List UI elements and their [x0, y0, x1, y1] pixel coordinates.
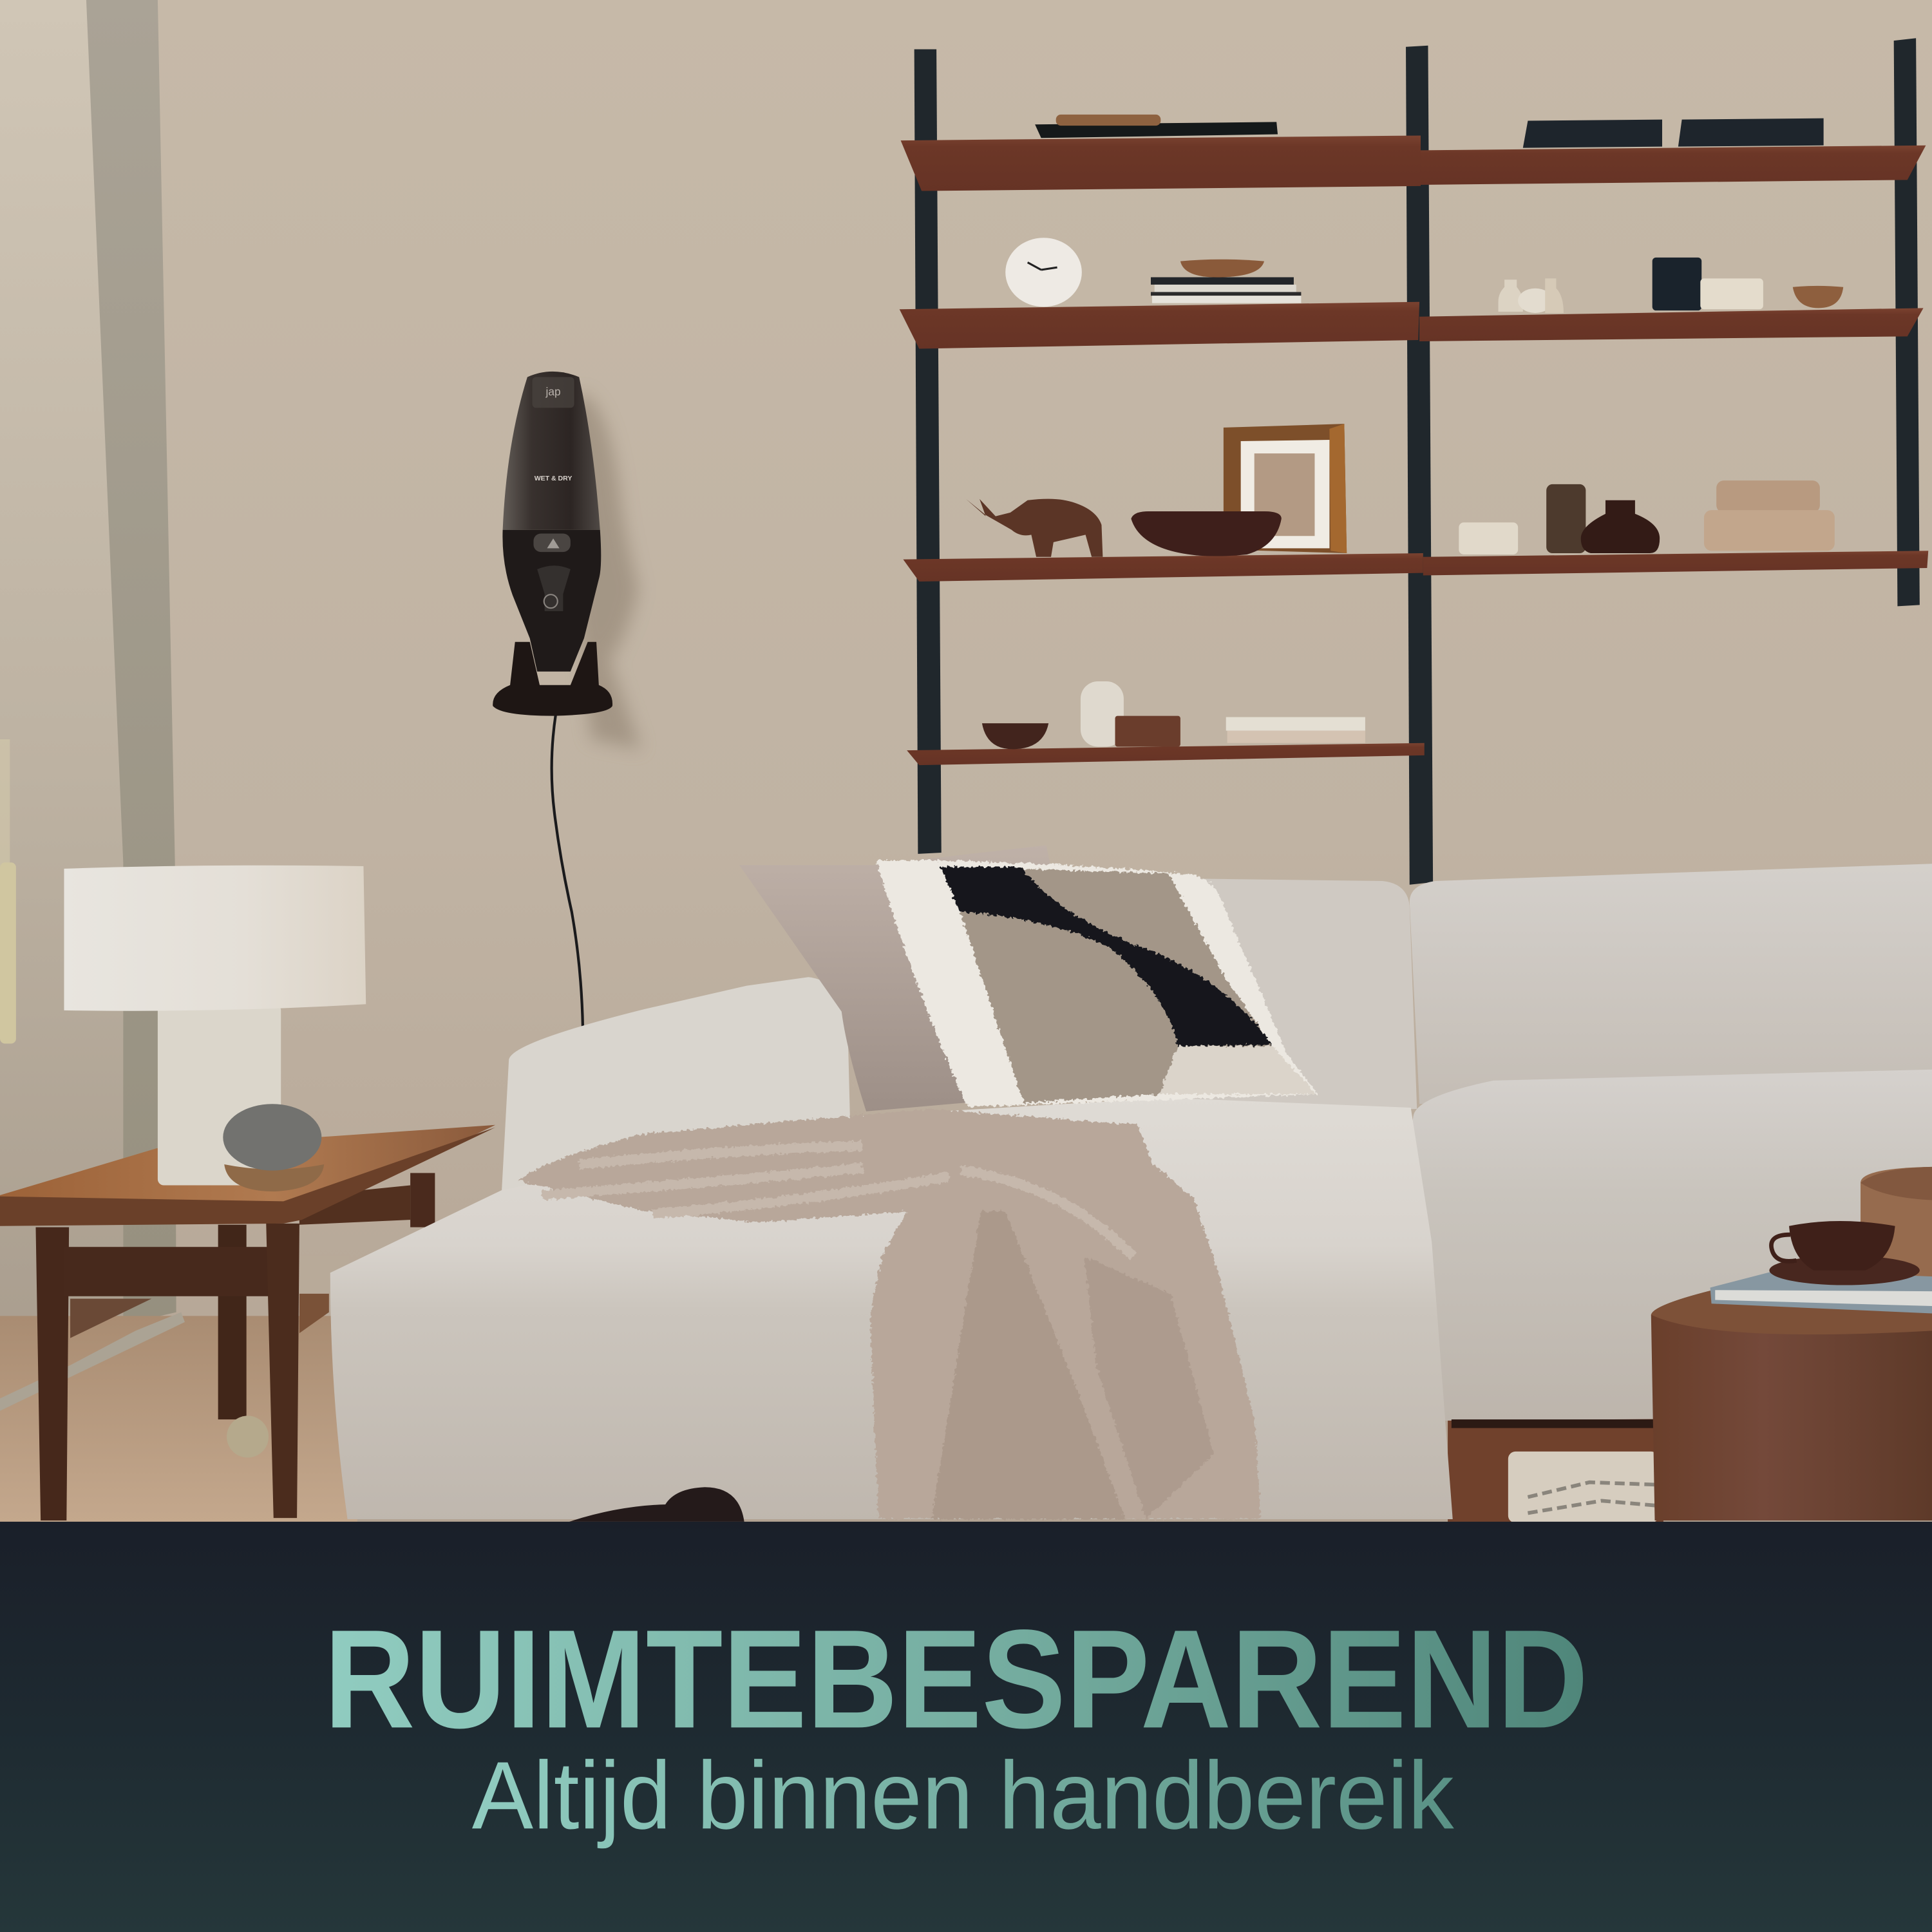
pillow black shape	[940, 866, 1273, 1046]
front patterned pillow	[876, 860, 1318, 1106]
throw shadow	[1084, 1257, 1214, 1519]
vacuum shadow	[554, 392, 641, 749]
fourth shelf	[907, 743, 1425, 765]
dust container	[503, 372, 600, 530]
charging cable	[552, 715, 583, 1028]
sofa	[330, 864, 1932, 1519]
picture frame	[1224, 424, 1347, 553]
second shelf	[900, 302, 1924, 348]
front legs and brace	[35, 1227, 69, 1520]
side table	[0, 1125, 495, 1520]
pillow lower band	[1159, 1046, 1316, 1094]
wall background	[0, 0, 1932, 1528]
object at bottom edge	[569, 1487, 744, 1522]
logo text: jap	[545, 385, 561, 398]
release button	[533, 533, 571, 552]
lamp base	[158, 1004, 281, 1186]
cup	[1789, 1221, 1895, 1271]
cup handle	[1771, 1235, 1797, 1261]
pillow body	[876, 860, 1318, 1106]
saucer	[1769, 1256, 1920, 1285]
sofa middle back cushion	[1183, 878, 1417, 1115]
sofa right seat	[1406, 1070, 1932, 1421]
wall shelving unit	[900, 38, 1928, 885]
knitted throw blanket	[518, 1109, 1260, 1519]
table lamp	[64, 866, 366, 1186]
model text: WET & DRY	[535, 475, 572, 482]
dark bowl	[1131, 511, 1282, 556]
top shelf objects	[1035, 115, 1824, 148]
throw fold lines	[542, 1146, 1133, 1257]
sofa right back cushion	[1410, 864, 1932, 1104]
bottom caption panel	[0, 1522, 1932, 1932]
headline: RUIMTEBESPAREND	[324, 1601, 1588, 1757]
rear legs and apron	[410, 1173, 435, 1227]
book and coffee cup	[1710, 1221, 1932, 1314]
top shelf	[901, 135, 1926, 191]
caster wheel	[227, 1416, 269, 1457]
clock	[1005, 238, 1082, 307]
control panel	[537, 565, 571, 611]
draped throw	[518, 1109, 1260, 1519]
wall-mounted handheld vacuum	[493, 372, 641, 1028]
motor body	[502, 530, 601, 672]
floor	[0, 1256, 1663, 1523]
subheading: Altijd binnen handbereik	[472, 1741, 1454, 1849]
uprights	[914, 38, 1920, 885]
wooden stump table	[1651, 1280, 1932, 1520]
lamp shade	[64, 866, 366, 1011]
pillow pattern field	[940, 866, 1273, 1103]
back round stump	[1861, 1167, 1932, 1290]
ceramics on second shelf	[1499, 258, 1843, 313]
decorative candle on plate	[223, 1104, 324, 1191]
back pillow	[739, 845, 1088, 1112]
third shelf	[903, 551, 1928, 582]
sofa left arm	[502, 977, 851, 1195]
fourth shelf objects	[982, 681, 1365, 749]
panel background	[0, 1522, 1932, 1932]
charger base	[493, 642, 612, 716]
rug	[1508, 1452, 1658, 1523]
curtain	[0, 0, 176, 1399]
books and bowl	[1151, 260, 1301, 303]
power button	[544, 594, 558, 608]
sofa chaise	[330, 1098, 1453, 1519]
book	[1710, 1271, 1932, 1314]
centre fold	[931, 1211, 1125, 1519]
shadow under right seat	[1452, 1419, 1654, 1428]
table top	[0, 1125, 495, 1225]
third shelf ceramics	[1459, 480, 1835, 554]
rhino figurine	[966, 499, 1103, 557]
